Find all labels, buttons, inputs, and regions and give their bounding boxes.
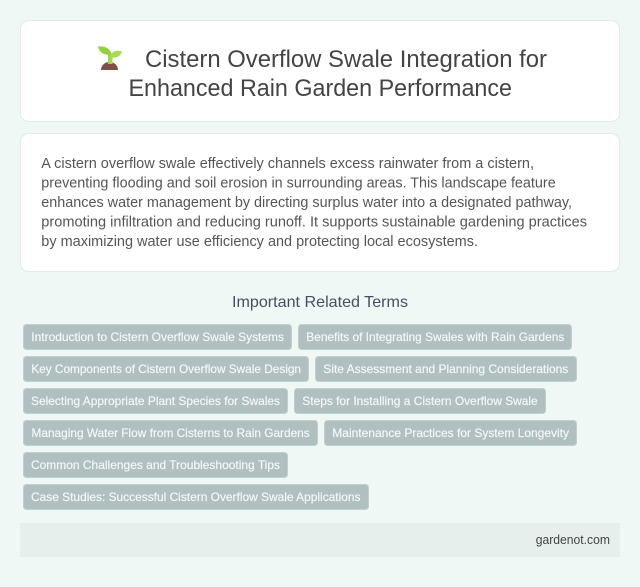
tag <box>24 356 308 382</box>
panel: description <box>20 134 620 272</box>
icon: seedling <box>98 46 122 70</box>
tag: Managing Water Flow from Cisterns to Rain Gardens <box>32 426 310 440</box>
footer <box>20 523 620 557</box>
tag <box>324 420 576 446</box>
description text <box>41 155 587 250</box>
tag <box>24 420 318 446</box>
description text: by maximizing water use efficiency and protecting local ecosystems. <box>41 233 478 250</box>
panel: related term tags <box>24 324 576 510</box>
tag: Steps for Installing a Cistern Overflow Swale <box>302 394 538 408</box>
description text: A cistern overflow swale effectively channels excess rainwater from a cistern, <box>41 155 534 172</box>
tag: Case Studies: Successful Cistern Overflow Swale Applications <box>31 490 360 504</box>
tag <box>298 324 572 350</box>
description text: enhances water management by directing surplus water into a designated pathway, <box>41 194 572 211</box>
tag: Site Assessment and Planning Considerations <box>323 362 568 376</box>
footer: gardenot.com <box>536 533 610 547</box>
title: Cistern Overflow Swale Integration for <box>145 46 547 73</box>
tag <box>24 388 288 414</box>
title <box>128 46 547 102</box>
tag <box>24 452 288 478</box>
tag <box>24 324 292 350</box>
tag: Benefits of Integrating Swales with Rain Gardens <box>306 330 564 344</box>
tag: Key Components of Cistern Overflow Swale Design <box>31 362 301 376</box>
panel: title card <box>20 20 620 122</box>
tag <box>24 484 368 510</box>
tag: Common Challenges and Troubleshooting Tips <box>31 458 280 472</box>
tag <box>316 356 576 382</box>
title: Enhanced Rain Garden Performance <box>128 75 512 102</box>
tag <box>294 388 546 414</box>
description text: promoting infiltration and reducing runoff. It supports sustainable gardening practices <box>41 214 587 230</box>
heading: important related terms: Important Related Terms <box>232 294 408 311</box>
description text: preventing flooding and soil erosion in surrounding areas. This landscape feature <box>41 174 556 192</box>
tag: Introduction to Cistern Overflow Swale Systems <box>31 330 284 344</box>
tag: Maintenance Practices for System Longevity <box>332 426 569 440</box>
tag: Selecting Appropriate Plant Species for Swales <box>31 394 280 408</box>
